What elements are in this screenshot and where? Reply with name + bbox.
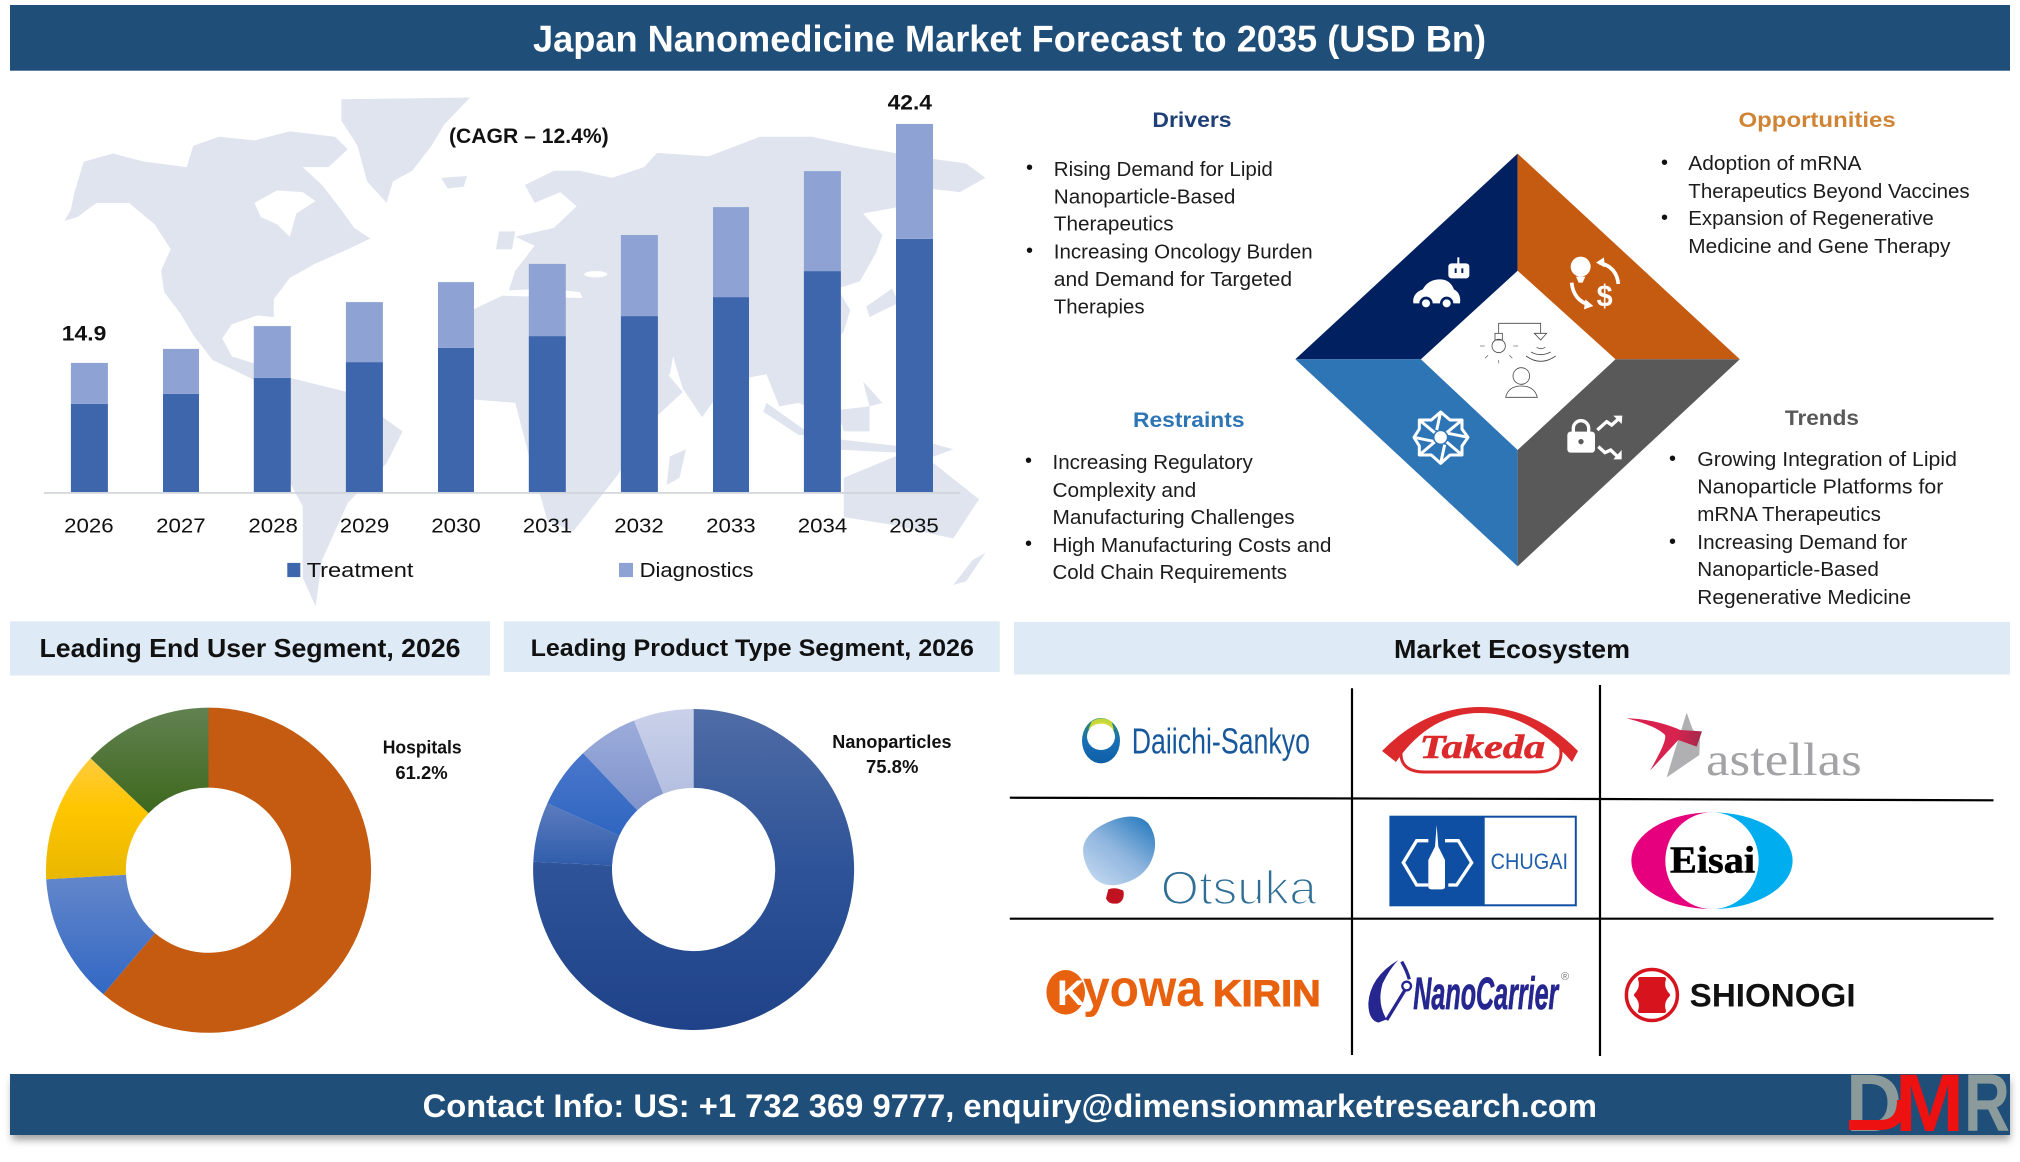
icon: flower network	[1414, 412, 1468, 463]
bullets: opportunities: Medicine and Gene Therapy	[1688, 235, 1951, 258]
logo: Daiichi-Sankyo	[1082, 718, 1310, 763]
label: nanoparticles	[832, 732, 952, 777]
legend	[287, 559, 754, 582]
icons in diamond	[1413, 257, 1622, 463]
value label 2026: 14.9	[62, 323, 106, 346]
logo: Shionogi: SHIONOGI	[1690, 978, 1856, 1014]
donut chart: end user	[46, 708, 371, 1033]
heading: trends: Trends	[1785, 406, 1859, 430]
year axis labels: 2031	[523, 514, 572, 538]
logo: DMR: D	[1846, 1058, 1902, 1149]
bullets: trends: Growing Integration of Lipid	[1697, 448, 1957, 471]
logo: Kyowa Kirin	[1046, 960, 1321, 1018]
bullets: drivers: Increasing Oncology Burden	[1054, 241, 1313, 264]
diamond quadrants	[1295, 154, 1740, 566]
logo: astellas: astellas	[1706, 734, 1862, 786]
heading: market ecosystem	[1014, 622, 2010, 674]
bullets: trends: Regenerative Medicine	[1697, 586, 1911, 609]
bullets: restraints: High Manufacturing Costs and	[1052, 534, 1331, 557]
panel: market forecast bar chart	[44, 91, 985, 606]
year axis labels: 2030	[431, 514, 481, 538]
panel: market ecosystem	[1010, 622, 2010, 1056]
label: hospitals: 61.2%	[395, 763, 448, 783]
legend: Treatment	[307, 559, 414, 582]
panel: trends	[1669, 406, 1957, 609]
icon: idea and money cycle: $	[1597, 279, 1613, 313]
bullets: trends: Nanoparticle-Based	[1697, 558, 1879, 581]
label: nanoparticles: Nanoparticles	[832, 732, 952, 752]
year axis labels: 2032	[614, 514, 664, 538]
heading: opportunities: Opportunities	[1738, 108, 1896, 132]
bullets: opportunities	[1661, 152, 1970, 258]
bullets: restraints: Increasing Regulatory	[1052, 451, 1254, 474]
bullets: trends	[1669, 448, 1957, 609]
logo: DMR: M	[1895, 1058, 1964, 1149]
logo: Otsuka: Otsuka	[1161, 861, 1318, 914]
logo: Takeda: Takeda	[1420, 729, 1545, 766]
title banner	[10, 5, 2010, 71]
label: nanoparticles: 75.8%	[866, 757, 918, 777]
bullets: drivers: •	[1026, 157, 1033, 179]
logo: Kyowa Kirin: KIRIN	[1213, 973, 1321, 1014]
logo: Eisai: Eisai	[1670, 840, 1755, 882]
bullets: drivers: and Demand for Targeted	[1054, 268, 1292, 291]
panel: leading product type segment	[504, 621, 1000, 1030]
year axis labels: 2029	[340, 514, 389, 538]
bullets: trends: •	[1669, 531, 1676, 553]
heading: end user segment: Leading End User Segment, 2026	[40, 633, 460, 663]
logo: Otsuka	[1083, 817, 1318, 914]
bullets: restraints: Complexity and	[1052, 479, 1196, 502]
bullets: restraints: Cold Chain Requirements	[1052, 561, 1287, 584]
bullets: drivers	[1026, 157, 1313, 319]
logo: Takeda	[1382, 707, 1578, 772]
legend: Diagnostics	[640, 559, 754, 582]
icon: central hazard sensor and person	[1480, 323, 1556, 397]
panel: market dynamics diamond	[1295, 154, 1740, 566]
bullets: trends: Nanoparticle Platforms for	[1697, 476, 1943, 499]
bullets: restraints: Manufacturing Challenges	[1052, 506, 1295, 529]
heading: product type segment	[504, 621, 1000, 672]
heading: drivers: Drivers	[1152, 108, 1232, 132]
bullets: opportunities: Expansion of Regenerative	[1688, 207, 1934, 230]
world map background	[64, 97, 985, 606]
logo: astellas	[1627, 713, 1862, 786]
year axis labels: 2034	[798, 514, 847, 538]
bullets: drivers: •	[1026, 240, 1033, 262]
logo: Chugai	[1390, 817, 1576, 905]
CAGR label: (CAGR – 12.4%)	[449, 125, 609, 148]
panel: leading end user segment	[10, 621, 490, 1033]
logo: Kyowa Kirin: K	[1057, 974, 1085, 1013]
donut chart: product type	[533, 709, 854, 1030]
logo: Chugai: CHUGAI	[1491, 849, 1568, 874]
logo: Shionogi	[1626, 970, 1856, 1020]
footer contact banner	[10, 1058, 2010, 1149]
panel: opportunities	[1661, 108, 1970, 258]
bullets: trends: •	[1669, 448, 1676, 470]
logo: NanoCarrier: NanoCarrier	[1413, 968, 1560, 1019]
heading: product type segment: Leading Product Type Segment, 2026	[531, 635, 974, 662]
heading: end user segment	[10, 621, 490, 676]
diagnostics bars	[71, 124, 933, 404]
value label 2035: 42.4	[888, 91, 932, 114]
treatment bars	[71, 239, 933, 492]
bullets: drivers: Rising Demand for Lipid	[1054, 158, 1273, 181]
bullets: restraints: •	[1025, 450, 1032, 472]
logo: Daiichi-Sankyo: Daiichi-Sankyo	[1132, 720, 1310, 761]
bullets: restraints: •	[1025, 533, 1032, 555]
logo: Eisai	[1631, 812, 1793, 909]
contact text: Contact Info: US: +1 732 369 9777, enquiry@dimensionmarketresearch.com	[423, 1088, 1597, 1124]
heading: market ecosystem: Market Ecosystem	[1394, 634, 1630, 664]
icon: idea and money cycle	[1571, 257, 1618, 313]
bullets: opportunities: Therapeutics Beyond Vaccines	[1688, 180, 1970, 203]
title text: Japan Nanomedicine Market Forecast to 2035 (USD Bn)	[533, 19, 1486, 60]
bullets: trends: Increasing Demand for	[1697, 531, 1907, 554]
logo: DMR	[1846, 1058, 2010, 1149]
bullets: opportunities: Adoption of mRNA	[1688, 152, 1862, 175]
year axis labels: 2035	[889, 514, 939, 538]
logo: Kyowa Kirin: yowa	[1083, 960, 1204, 1018]
year axis labels: 2026	[64, 514, 114, 538]
bullets: restraints	[1025, 450, 1331, 584]
year axis labels: 2028	[248, 514, 298, 538]
bullets: opportunities: •	[1661, 152, 1668, 174]
year axis labels	[64, 514, 939, 538]
label: hospitals: Hospitals	[383, 738, 462, 758]
bullets: trends: mRNA Therapeutics	[1697, 503, 1881, 526]
bullets: drivers: Nanoparticle-Based	[1054, 186, 1235, 209]
heading: restraints: Restraints	[1133, 408, 1245, 432]
bullets: drivers: Therapeutics	[1054, 213, 1174, 236]
icon: car and robot	[1413, 257, 1469, 310]
bullets: drivers: Therapies	[1054, 296, 1145, 319]
panel: restraints	[1025, 408, 1331, 584]
logo: NanoCarrier	[1368, 960, 1569, 1023]
bullets: opportunities: •	[1661, 207, 1668, 229]
label: hospitals	[383, 738, 462, 783]
icon: lock and trend arrows	[1567, 416, 1622, 459]
logo: NanoCarrier: ®	[1561, 971, 1569, 983]
panel: drivers	[1026, 108, 1313, 319]
year axis labels: 2027	[156, 514, 206, 538]
year axis labels: 2033	[706, 514, 756, 538]
